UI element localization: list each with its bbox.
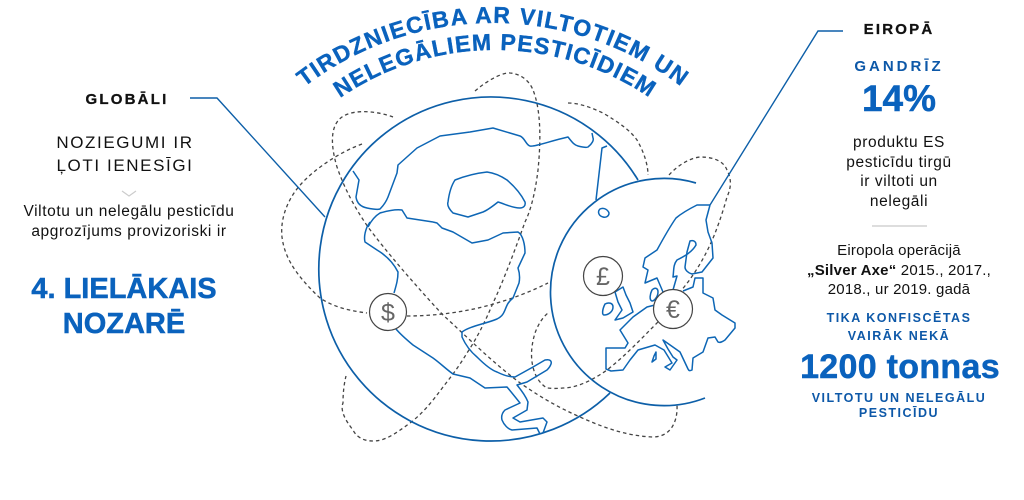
icon: dollar coin — [370, 294, 406, 330]
text: of illegal pesticides — [812, 391, 986, 420]
continents — [353, 128, 735, 434]
text: europol operation: 2018., ur 2019. gadā — [828, 281, 970, 298]
text: confiscated: VAIRĀK NEKĀ — [848, 328, 950, 342]
text: of illegal pesticides: VILTOTU UN NELEGĀLU — [812, 391, 986, 405]
icon: euro coin — [654, 290, 692, 328]
text: turnover — [23, 203, 234, 240]
icon: pound coin: £ — [596, 263, 610, 291]
icon: dollar coin: $ — [381, 299, 395, 327]
text: share of market: ir viltoti un — [860, 173, 938, 190]
icon: chevron — [122, 190, 136, 196]
text: of illegal pesticides: PESTICĪDU — [859, 406, 939, 420]
text: turnover: apgrozījums provizoriski ir — [31, 223, 227, 240]
stat: fourth largest: NOZARĒ — [63, 308, 185, 340]
divider — [872, 225, 927, 227]
text: europol operation — [807, 242, 991, 298]
text: confiscated: TIKA KONFISCĒTAS — [827, 311, 971, 325]
text: share of market: produktu ES — [853, 134, 945, 151]
text: crimes are profitable: ĻOTI IENESĪGI — [56, 156, 194, 174]
leader line: europe — [710, 31, 843, 205]
europe lens outline — [550, 178, 705, 406]
stat: 14 percent: 14% — [862, 78, 936, 119]
panel: europe — [800, 21, 1000, 420]
text: confiscated — [826, 311, 971, 342]
text: europol operation: „Silver Axe“ 2015., 2017., — [807, 262, 991, 278]
stat: 1200 tonnes: 1200 tonnas — [800, 348, 1000, 386]
text: europol operation: Eiropola operācijā — [837, 242, 961, 259]
text: turnover: Viltotu un nelegālu pesticīdu — [23, 203, 234, 220]
icon: euro coin: € — [666, 296, 680, 324]
text: share of market: pesticīdu tirgū — [846, 154, 952, 170]
main globe outline — [319, 97, 638, 441]
leader line: global — [190, 98, 325, 217]
heading: global: GLOBĀLI — [86, 91, 168, 108]
panel: global — [23, 91, 234, 340]
text: share of market — [846, 134, 952, 210]
stat: fourth largest: 4. LIELĀKAIS — [31, 273, 217, 305]
text: crimes are profitable — [56, 133, 194, 174]
title: TIRDZNIECĪBA AR VILTOTIEM UN — [294, 6, 690, 86]
text: share of market: nelegāli — [870, 192, 928, 210]
title: NELEGĀLIEM PESTICĪDIEM — [332, 34, 657, 98]
heading: europe: EIROPĀ — [864, 21, 934, 38]
text: crimes are profitable: NOZIEGUMI IR — [56, 133, 194, 152]
text: almost: GANDRĪZ — [854, 58, 944, 75]
icon: pound coin — [584, 256, 622, 296]
dashed trade routes — [282, 73, 730, 441]
stat: fourth largest — [31, 273, 217, 340]
